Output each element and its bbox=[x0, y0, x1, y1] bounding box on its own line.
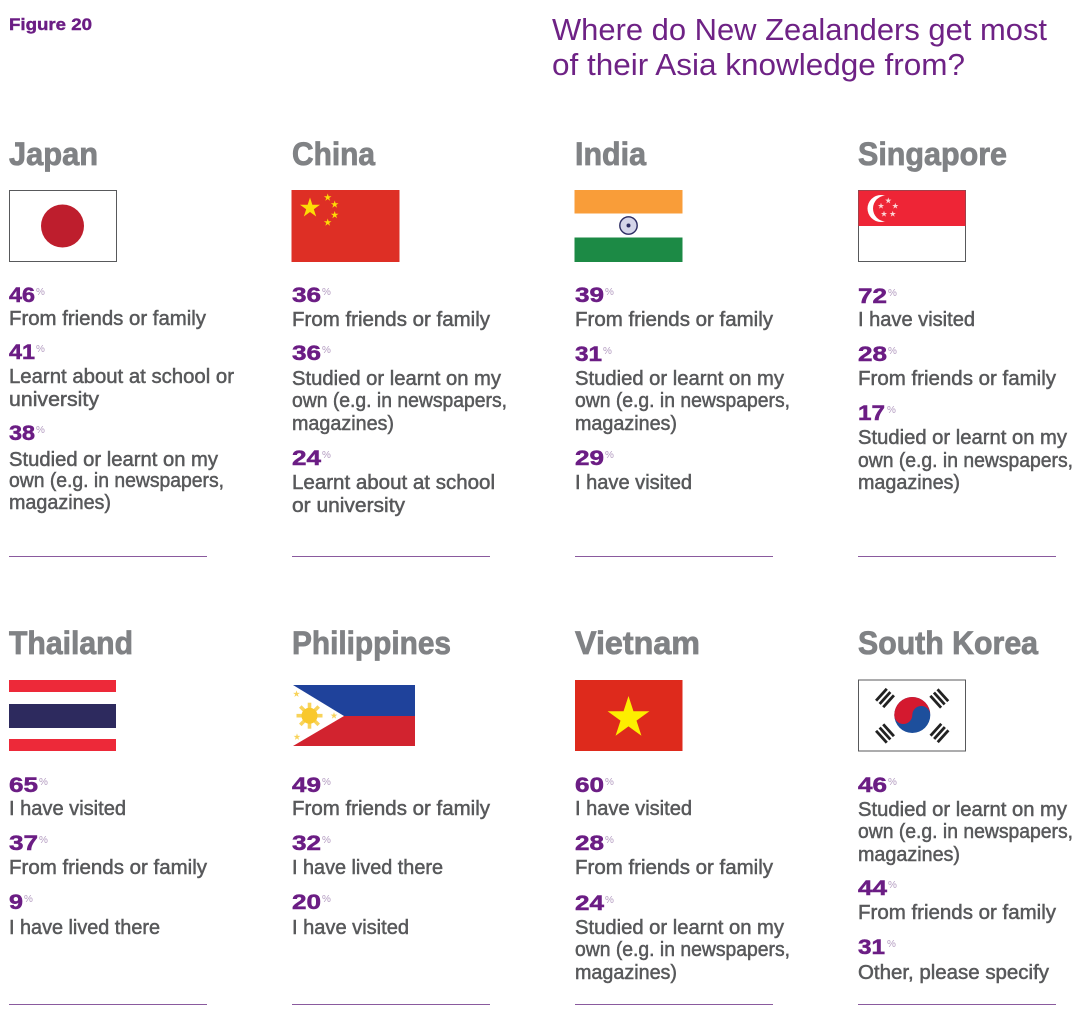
title: of their Asia knowledge from? bbox=[552, 47, 965, 82]
stat: 46% studied on my own: % bbox=[888, 777, 897, 788]
stat: 24% studied on my own: 24 bbox=[575, 892, 604, 915]
stat: 46% studied on my own: 46 bbox=[858, 774, 887, 797]
stat: 24% studied on my own: magazines) bbox=[575, 962, 677, 984]
stat: 65% visited: I have visited bbox=[9, 798, 126, 820]
stat: 41% school or university: Learnt about at school or bbox=[9, 366, 234, 388]
stat: 46% studied on my own: Studied or learnt on my bbox=[858, 799, 1067, 821]
stat: 20% visited: 20 bbox=[292, 891, 321, 914]
stat: 36% studied on my own: % bbox=[322, 345, 331, 356]
stat: 41% school or university: university bbox=[9, 389, 99, 411]
stat: 17% studied on my own: own (e.g. in newspapers, bbox=[858, 450, 1073, 472]
stat: 36% studied on my own bbox=[292, 342, 507, 435]
stat: 38% studied on my own: own (e.g. in newspapers, bbox=[9, 470, 224, 492]
stat: 9% lived there bbox=[9, 891, 160, 939]
stat: 32% lived there: % bbox=[322, 835, 331, 846]
stat: 24% school or university: Learnt about at school bbox=[292, 472, 495, 494]
stat: 39% from friends or family: From friends or family bbox=[575, 309, 773, 331]
figure label: Figure 20 bbox=[9, 15, 92, 34]
stat: 41% school or university bbox=[9, 341, 234, 411]
stat: 31% other: % bbox=[887, 939, 896, 950]
flag: Philippines bbox=[293, 685, 415, 746]
stat: 9% lived there: % bbox=[24, 894, 33, 905]
heading: Singapore: Singapore bbox=[858, 136, 1007, 172]
stat: 39% from friends or family: % bbox=[605, 287, 614, 298]
panel: South Korea bbox=[858, 625, 1073, 1004]
stat: 24% school or university: % bbox=[322, 450, 331, 461]
heading: South Korea: South Korea bbox=[858, 625, 1038, 661]
stat: 36% from friends or family: % bbox=[322, 287, 331, 298]
stat: 31% other bbox=[858, 936, 1049, 984]
stat: 24% studied on my own: own (e.g. in newspapers, bbox=[575, 939, 790, 961]
stat: 49% from friends or family: From friends or family bbox=[292, 798, 490, 820]
stat: 72% visited: 72 bbox=[858, 285, 887, 308]
stat: 24% studied on my own bbox=[575, 892, 790, 984]
flag: South Korea bbox=[858, 680, 966, 751]
stat: 24% studied on my own: % bbox=[605, 895, 614, 906]
stat: 20% visited: I have visited bbox=[292, 917, 409, 939]
flag: China bbox=[292, 190, 400, 262]
stat: 20% visited: % bbox=[322, 894, 331, 905]
stat: 28% from friends or family: From friends or family bbox=[858, 368, 1056, 390]
stat: 31% studied on my own: magazines) bbox=[575, 413, 677, 435]
stat: 24% studied on my own: Studied or learnt on my bbox=[575, 917, 784, 939]
stat: 17% studied on my own: % bbox=[887, 405, 896, 416]
stat: 31% studied on my own: % bbox=[603, 346, 612, 357]
stat: 72% visited: I have visited bbox=[858, 309, 975, 331]
stat: 49% from friends or family bbox=[292, 774, 490, 820]
stat: 28% from friends or family bbox=[575, 832, 773, 879]
flag: Japan bbox=[10, 190, 116, 262]
stat: 39% from friends or family: 39 bbox=[575, 284, 604, 307]
stat: 49% from friends or family: 49 bbox=[292, 774, 321, 797]
stat: 31% studied on my own: Studied or learnt on my bbox=[575, 368, 784, 390]
stat: 38% studied on my own: % bbox=[36, 425, 45, 436]
stat: 37% from friends or family: % bbox=[39, 835, 48, 846]
stat: 29% visited: I have visited bbox=[575, 472, 692, 494]
stat: 28% from friends or family: 28 bbox=[858, 343, 887, 366]
stat: 72% visited bbox=[858, 285, 975, 331]
stat: 20% visited bbox=[292, 891, 409, 939]
stat: 29% visited bbox=[575, 447, 692, 494]
stat: 38% studied on my own bbox=[9, 422, 224, 514]
stat: 36% studied on my own: Studied or learnt on my bbox=[292, 368, 501, 390]
stat: 65% visited bbox=[9, 774, 126, 820]
flag: Vietnam bbox=[575, 680, 682, 751]
stat: 65% visited: 65 bbox=[9, 774, 38, 797]
stat: 24% school or university: or university bbox=[292, 495, 405, 517]
stat: 9% lived there: 9 bbox=[9, 891, 23, 914]
stat: 31% studied on my own bbox=[575, 343, 790, 435]
stat: 31% other: 31 bbox=[858, 936, 885, 959]
stat: 37% from friends or family: From friends or family bbox=[9, 857, 207, 879]
stat: 29% visited: % bbox=[605, 450, 614, 461]
panel: Singapore bbox=[858, 136, 1073, 556]
stat: 46% studied on my own bbox=[858, 774, 1073, 866]
heading: Vietnam: Vietnam bbox=[575, 625, 700, 661]
stat: 31% other: Other, please specify bbox=[858, 962, 1049, 984]
stat: 17% studied on my own: Studied or learnt on my bbox=[858, 427, 1067, 449]
stat: 41% school or university: 41 bbox=[9, 341, 35, 364]
stat: 36% from friends or family: 36 bbox=[292, 284, 321, 307]
stat: 9% lived there: I have lived there bbox=[9, 917, 160, 939]
stat: 36% from friends or family: From friends or family bbox=[292, 309, 490, 331]
flag: Singapore bbox=[858, 190, 966, 262]
stat: 32% lived there: I have lived there bbox=[292, 857, 443, 879]
stat: 60% visited: I have visited bbox=[575, 798, 692, 820]
panel: Philippines bbox=[292, 625, 490, 1004]
stat: 17% studied on my own bbox=[858, 402, 1073, 494]
title: Where do New Zealanders get most bbox=[552, 12, 1047, 47]
stat: 60% visited bbox=[575, 774, 692, 820]
heading: Thailand: Thailand bbox=[9, 625, 133, 661]
panel: Thailand bbox=[9, 625, 207, 1004]
stat: 46% studied on my own: own (e.g. in newspapers, bbox=[858, 821, 1073, 843]
stat: 24% school or university: 24 bbox=[292, 447, 321, 470]
stat: 46% studied on my own: magazines) bbox=[858, 844, 960, 866]
stat: 60% visited: 60 bbox=[575, 774, 604, 797]
heading: India: India bbox=[575, 136, 646, 172]
stat: 28% from friends or family bbox=[858, 343, 1056, 390]
stat: 28% from friends or family: % bbox=[888, 346, 897, 357]
stat: 24% school or university bbox=[292, 447, 495, 517]
stat: 60% visited: % bbox=[605, 777, 614, 788]
stat: 17% studied on my own: 17 bbox=[858, 402, 885, 425]
stat: 46% from friends or family: % bbox=[36, 287, 45, 298]
stat: 49% from friends or family: % bbox=[322, 777, 331, 788]
stat: 17% studied on my own: magazines) bbox=[858, 472, 960, 494]
title bbox=[552, 12, 1047, 82]
heading: Japan: Japan bbox=[9, 136, 98, 172]
stat: 36% studied on my own: own (e.g. in newspapers, bbox=[292, 390, 507, 412]
stat: 36% from friends or family bbox=[292, 284, 490, 331]
heading: China: China bbox=[292, 136, 375, 172]
panel: China bbox=[292, 136, 507, 556]
stat: 38% studied on my own: Studied or learnt on my bbox=[9, 449, 218, 471]
stat: 36% studied on my own: magazines) bbox=[292, 413, 394, 435]
stat: 65% visited: % bbox=[39, 777, 48, 788]
stat: 31% studied on my own: 31 bbox=[575, 343, 602, 366]
stat: 38% studied on my own: 38 bbox=[9, 422, 35, 445]
stat: 28% from friends or family: 28 bbox=[575, 832, 604, 855]
stat: 46% from friends or family: 46 bbox=[9, 284, 35, 307]
stat: 44% from friends or family: From friends or family bbox=[858, 902, 1056, 924]
stat: 44% from friends or family: % bbox=[888, 880, 897, 891]
stat: 46% from friends or family: From friends or family bbox=[9, 308, 206, 330]
stat: 38% studied on my own: magazines) bbox=[9, 492, 111, 514]
stat: 28% from friends or family: From friends or family bbox=[575, 857, 773, 879]
stat: 32% lived there bbox=[292, 832, 443, 879]
stat: 28% from friends or family: % bbox=[605, 835, 614, 846]
stat: 44% from friends or family: 44 bbox=[858, 877, 887, 900]
stat: 41% school or university: % bbox=[36, 344, 45, 355]
stat: 46% from friends or family bbox=[9, 284, 206, 330]
stat: 72% visited: % bbox=[888, 288, 897, 299]
panel: Japan bbox=[9, 136, 234, 556]
stat: 37% from friends or family bbox=[9, 832, 207, 879]
flag: India bbox=[574, 190, 682, 262]
stat: 39% from friends or family bbox=[575, 284, 773, 331]
stat: 32% lived there: 32 bbox=[292, 832, 321, 855]
stat: 29% visited: 29 bbox=[575, 447, 604, 470]
stat: 37% from friends or family: 37 bbox=[9, 832, 38, 855]
panel: Vietnam bbox=[575, 625, 790, 1004]
stat: 31% studied on my own: own (e.g. in newspapers, bbox=[575, 390, 790, 412]
stat: 36% studied on my own: 36 bbox=[292, 342, 321, 365]
heading: Philippines: Philippines bbox=[292, 625, 451, 661]
flag: Thailand bbox=[9, 680, 116, 751]
stat: 44% from friends or family bbox=[858, 877, 1056, 924]
panel: India bbox=[574, 136, 790, 556]
